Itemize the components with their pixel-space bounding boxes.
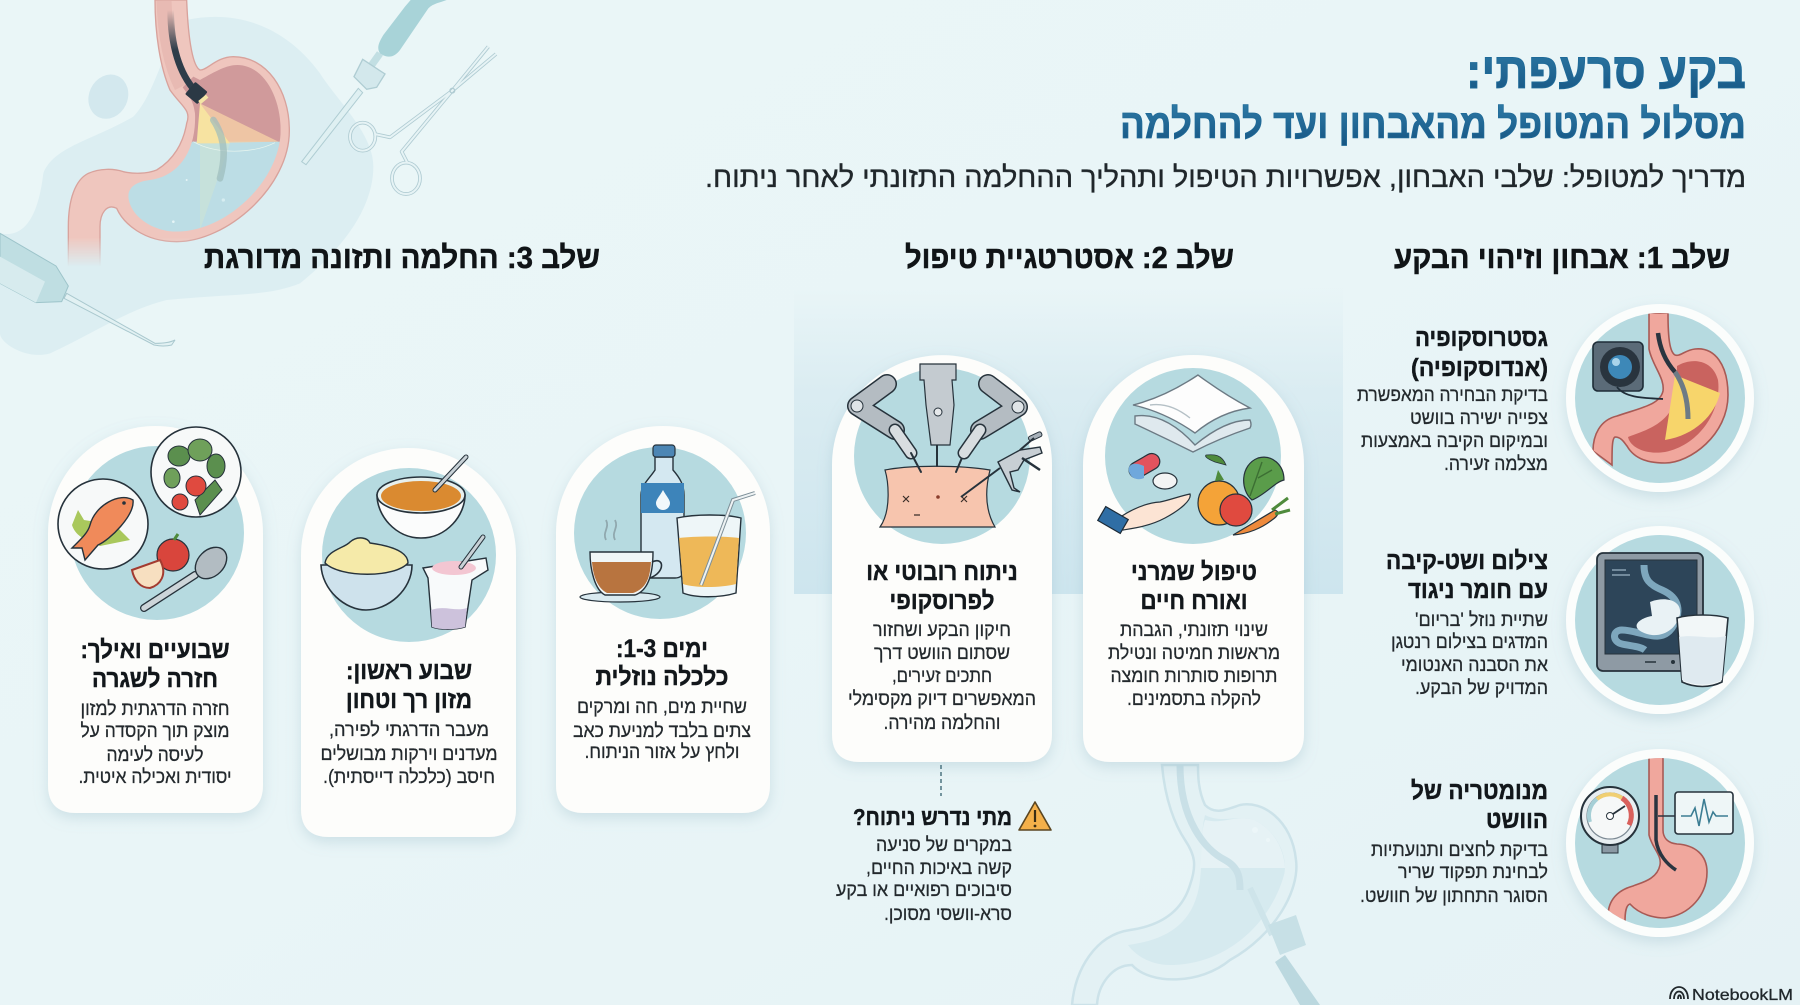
callout: when is surgery needed: קשה באיכות החיים, bbox=[866, 857, 1012, 879]
text: manometry: מנומטריה של bbox=[1411, 777, 1548, 805]
panel: step 1, manometry bbox=[1360, 749, 1754, 937]
dashed connector bbox=[940, 765, 942, 796]
title: בקע סרעפתי: bbox=[1466, 43, 1746, 99]
text: conservative treatment: מראשות חמיטה ונטילת bbox=[1108, 642, 1280, 664]
text: robotic surgery: חיקון הבקע ושחזור bbox=[873, 619, 1011, 641]
text: two weeks onward: מוצק תוך הקסדה על bbox=[80, 720, 230, 742]
icon: manometry bbox=[1566, 749, 1754, 937]
logo: NotebookLM: NotebookLM bbox=[1692, 987, 1793, 1004]
heading: step 3: שלב 3: החלמה ותזונה מדורגת bbox=[204, 240, 600, 275]
icon: endoscopy circle bbox=[1566, 304, 1754, 492]
text: conservative treatment: טיפול שמרני bbox=[1131, 558, 1257, 586]
text: gastroscopy: (אנדוסקופיה) bbox=[1411, 354, 1548, 382]
text: robotic surgery: המאפשרים דיוק מקסימלי bbox=[848, 688, 1036, 710]
panel: step 2, conservative treatment bbox=[1083, 355, 1304, 762]
icon: plates of fish and salad, apple, spoon bbox=[58, 427, 244, 620]
panel: step 3, first week bbox=[301, 448, 516, 837]
icon: x-ray monitor and glass bbox=[1566, 526, 1754, 714]
text: first week: מעבר הדרגתי לפירה, bbox=[329, 719, 489, 741]
subtitle: מסלול המטופל מהאבחון ועד להחלמה bbox=[1120, 101, 1746, 147]
icon: bottle, tea and juice bbox=[574, 445, 755, 619]
text: two weeks onward: שבועיים ואילך: bbox=[80, 636, 230, 664]
instrument: syringe bbox=[0, 233, 175, 346]
text: barium swallow: המדגים בצילום רנטגן bbox=[1391, 631, 1548, 653]
instrument: trocar bbox=[302, 0, 447, 165]
text: first week bbox=[320, 657, 498, 788]
text: robotic surgery: חתכים זעירים, bbox=[892, 665, 992, 687]
text: gastroscopy: צפייה ישירה בוושט bbox=[1410, 407, 1548, 429]
text: barium swallow: עם חומר ניגוד bbox=[1408, 576, 1548, 604]
text: manometry: הוושט bbox=[1486, 806, 1548, 834]
callout: when is surgery needed: מתי נדרש ניתוח? bbox=[853, 804, 1012, 830]
panel: step 3, two weeks onward bbox=[48, 426, 263, 813]
text: two weeks onward: חזרה הדרגתית למזון bbox=[80, 698, 230, 720]
panel: step 1, gastroscopy bbox=[1357, 304, 1754, 492]
heading: step 1: שלב 1: אבחון וזיהוי הבקע bbox=[1394, 240, 1730, 275]
icon: robotic arms and abdomen bbox=[851, 364, 1043, 544]
step 2 background band bbox=[794, 287, 1343, 594]
text: conservative treatment: ואורח חיים bbox=[1140, 587, 1248, 615]
text: barium swallow: שתיית נוזל 'בריום' bbox=[1415, 609, 1548, 631]
text: days 1-3: ימים 1-3: bbox=[616, 635, 708, 663]
text: manometry: בדיקת לחצים ותנועתיות bbox=[1371, 839, 1548, 861]
text: first week: חיסב (כלכלה דייסתית). bbox=[323, 766, 495, 788]
text: robotic surgery: ניתוח רובוטי או bbox=[866, 558, 1018, 586]
text: conservative treatment: שינוי תזונתי, הגבהת bbox=[1120, 619, 1268, 641]
text: first week: מזון רך וטחון bbox=[346, 686, 472, 714]
callout: when is surgery needed: סיבוכים רפואיים או בקע bbox=[836, 879, 1012, 901]
panel: step 2, robotic surgery bbox=[832, 355, 1052, 762]
text: barium swallow: צילום ושט-קיבה bbox=[1386, 547, 1548, 575]
icon: pillows, pills, hand and vegetables bbox=[1098, 368, 1290, 544]
text: days 1-3: כלכלה נוזלית bbox=[596, 663, 728, 691]
text: barium swallow: המדויק של הבקע. bbox=[1415, 677, 1548, 699]
illustration: stomach with endoscope, top left bbox=[0, 0, 496, 355]
text: manometry: לבחינת תפקוד שריר bbox=[1398, 861, 1548, 883]
text: two weeks onward: חזרה לשגרה bbox=[92, 665, 218, 693]
text: conservative treatment bbox=[1108, 558, 1280, 710]
text: manometry bbox=[1360, 777, 1548, 907]
text: barium swallow: את הסבנה האנטומי bbox=[1401, 654, 1548, 676]
text: gastroscopy: מצלמה זעירה. bbox=[1444, 453, 1548, 475]
text: days 1-3: ולחץ על אזור הניתוח. bbox=[584, 741, 740, 763]
callout: when is surgery needed: במקרים של סניעה bbox=[876, 834, 1012, 856]
text: gastroscopy: גסטרוסקופיה bbox=[1415, 324, 1548, 352]
decorative stomach illustration, bottom centre bbox=[1072, 765, 1320, 1005]
text: first week: שבוע ראשון: bbox=[346, 657, 472, 685]
text: gastroscopy: בדיקת הבחירה המאפשרת bbox=[1357, 384, 1548, 406]
text: conservative treatment: להקלה בתסמינים. bbox=[1127, 688, 1261, 710]
text: robotic surgery: והחלמה מהירה. bbox=[884, 712, 1000, 734]
callout: when is surgery needed: סרא-וושסי מסוכן. bbox=[884, 903, 1012, 925]
text: robotic surgery bbox=[848, 558, 1036, 734]
text: manometry: הסוגר התחתון של חוושט. bbox=[1360, 885, 1548, 907]
instrument: scissors bbox=[350, 47, 496, 194]
panel: step 1, barium swallow bbox=[1386, 526, 1754, 714]
heading: step 2: שלב 2: אסטרטגיית טיפול bbox=[905, 240, 1234, 275]
panel: step 3, days 1-3 bbox=[556, 426, 770, 813]
text: conservative treatment: תרופות סותרות חומצה bbox=[1110, 665, 1278, 687]
text: barium swallow bbox=[1386, 547, 1548, 699]
text: days 1-3 bbox=[573, 635, 751, 763]
text: days 1-3: צתים בלבד למניעת כאב bbox=[573, 720, 751, 742]
text: two weeks onward bbox=[78, 636, 232, 788]
text: gastroscopy: ובמיקום הקיבה באמצעות bbox=[1361, 430, 1548, 452]
icon: soups, puree and yoghurt bbox=[321, 457, 496, 642]
text: first week: מעדנים וירקות מבושלים bbox=[320, 743, 498, 765]
icon: warning triangle bbox=[1019, 802, 1051, 830]
text: robotic surgery: לפרוסקופי bbox=[890, 587, 994, 615]
text: two weeks onward: יסודית ואכילה איטית. bbox=[78, 766, 232, 788]
description: מדריך למטופל: שלבי האבחון, אפשרויות הטיפול ותהליך ההחלמה התזונתי לאחר ניתוח. bbox=[705, 162, 1746, 194]
text: two weeks onward: לעיסה לעימה bbox=[106, 744, 204, 766]
text: days 1-3: שחיית מים, חה ומרקים bbox=[577, 696, 747, 718]
text: gastroscopy bbox=[1357, 324, 1548, 475]
callout: when is surgery needed bbox=[836, 802, 1051, 925]
text: robotic surgery: שסתום הוושט דרך bbox=[874, 642, 1010, 664]
